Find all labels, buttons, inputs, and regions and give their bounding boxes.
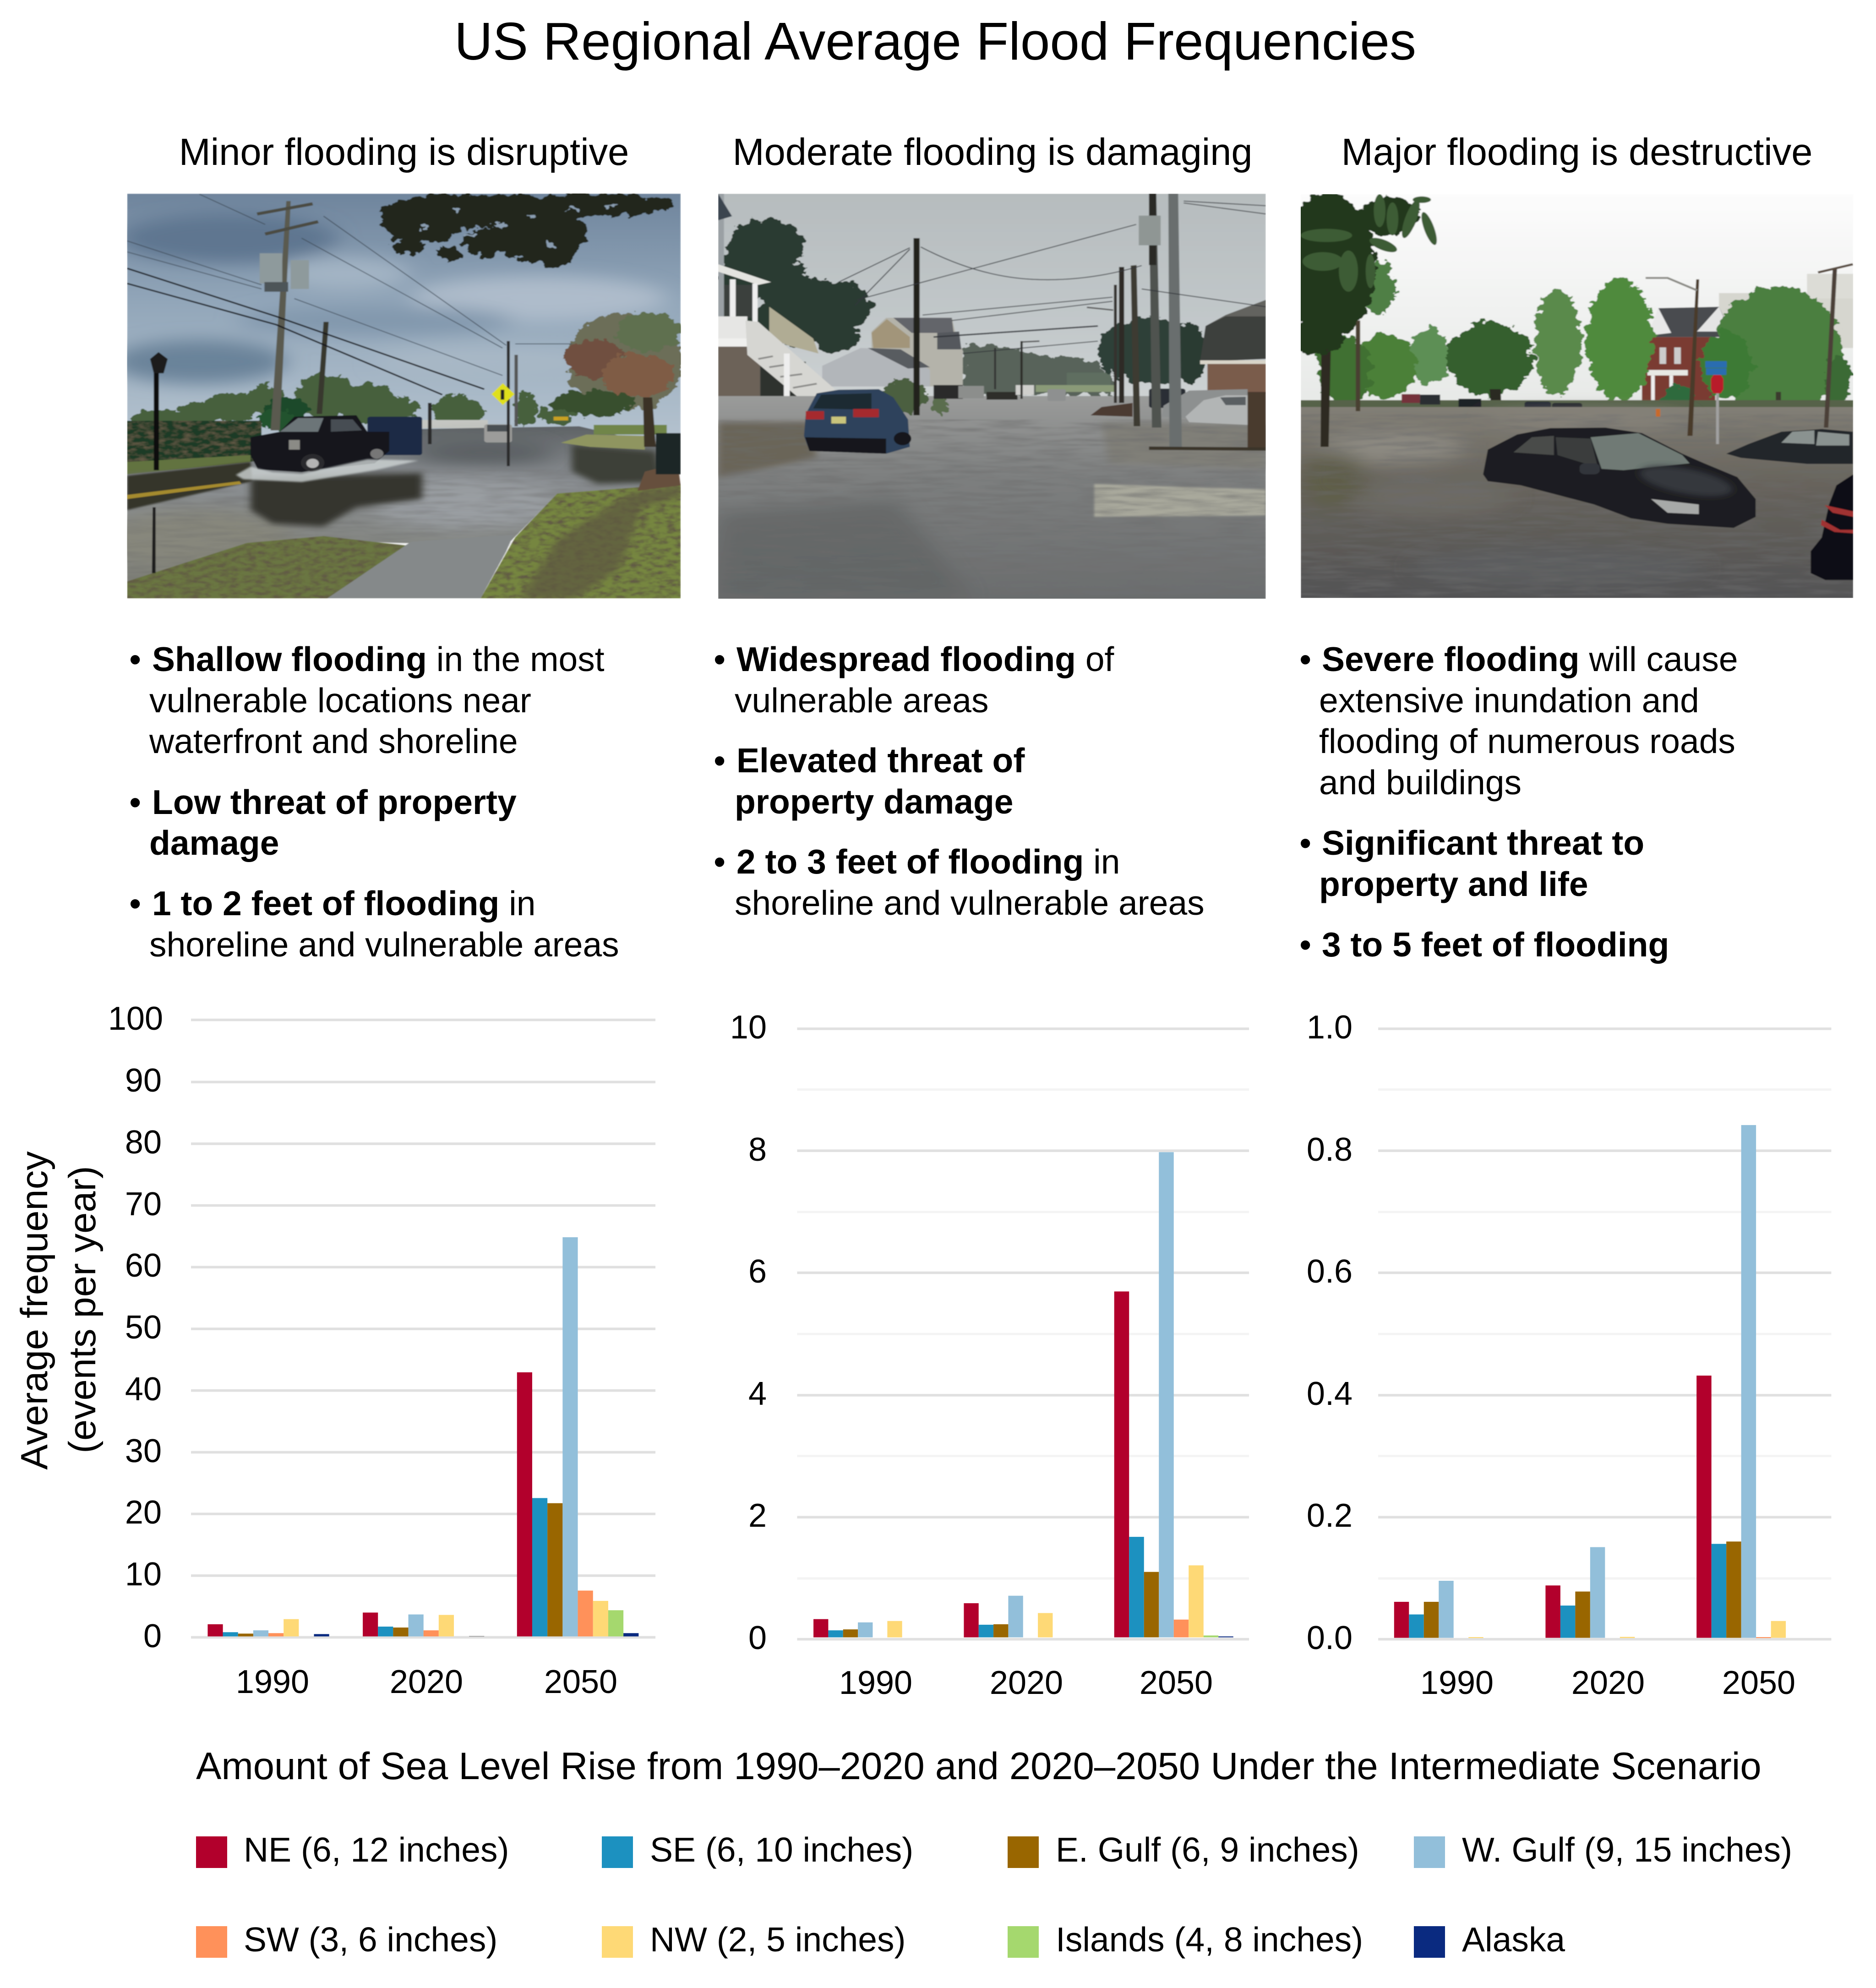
x-axis labels: 2050	[1722, 1665, 1795, 1701]
right tree	[552, 312, 683, 447]
text block: minor flooding bullets: vulnerable locations near	[149, 681, 531, 720]
bars 2050	[1114, 1152, 1233, 1637]
y-axis tick labels: 80	[125, 1124, 162, 1161]
y-axis tick labels: 0	[748, 1620, 767, 1656]
text block: minor flooding bullets: damage	[149, 824, 279, 862]
text block: minor flooding bullets: waterfront and shoreline	[149, 722, 518, 760]
y-axis tick labels: 30	[125, 1433, 162, 1469]
x-axis labels: 2050	[544, 1664, 617, 1700]
text block: moderate flooding bullets	[714, 640, 1205, 922]
x-axis labels: 2020	[1571, 1665, 1645, 1701]
y-axis tick labels: 1.0	[1307, 1009, 1352, 1046]
y-axis tick labels: 4	[748, 1376, 767, 1412]
brick house	[1642, 307, 1734, 403]
houses	[822, 318, 1116, 392]
bars 2020	[363, 1612, 484, 1637]
bars 2050	[517, 1237, 638, 1636]
poles and signs	[1320, 264, 1853, 447]
bars 2020	[1545, 1547, 1635, 1638]
heading: major flooding: Major flooding is destructive	[1342, 131, 1812, 173]
legend item: Alaska	[1414, 1920, 1565, 1959]
x-axis labels: 1990	[839, 1665, 912, 1701]
y-axis tick labels: 2	[748, 1497, 767, 1534]
y-axis tick labels: 10	[730, 1009, 767, 1046]
bushes and background vehicles	[882, 380, 1133, 417]
y-axis tick labels: 60	[125, 1247, 162, 1284]
x-axis labels: 2050	[1140, 1665, 1213, 1701]
y-axis tick labels	[1307, 1009, 1352, 1656]
main car	[1483, 428, 1756, 528]
bars 1990	[1394, 1581, 1483, 1638]
text block: moderate flooding bullets: •	[714, 640, 725, 678]
y-axis tick labels: 0	[143, 1618, 162, 1655]
text block: moderate flooding bullets: shoreline and vulnerable areas	[735, 884, 1205, 922]
y-axis tick labels: 0.0	[1307, 1620, 1352, 1656]
text block: major flooding bullets: extensive inundation and	[1319, 681, 1699, 720]
y-axis tick labels: 40	[125, 1371, 162, 1408]
flood water	[718, 396, 1266, 599]
text block: major flooding bullets: •	[1299, 640, 1311, 678]
y-axis tick labels: 100	[108, 1000, 163, 1037]
text block: major flooding bullets: Significant threat to	[1322, 824, 1644, 862]
chart: minor flooding frequencies	[108, 1000, 655, 1700]
overhanging magnolia	[1281, 193, 1440, 355]
text block: minor flooding bullets: •	[129, 640, 141, 678]
left elevated house and stairs	[718, 194, 835, 420]
y-axis tick labels: 6	[748, 1253, 767, 1290]
legend item: E. Gulf: E. Gulf (6, 9 inches)	[1056, 1830, 1359, 1869]
bars 1990	[813, 1619, 902, 1637]
parked cars on right	[1149, 388, 1266, 448]
chart: moderate flooding frequencies	[730, 1009, 1249, 1701]
text block: minor flooding bullets: •	[129, 884, 141, 923]
y-axis tick labels: 70	[125, 1186, 162, 1223]
text block: major flooding bullets: 3 to 5 feet of flooding	[1322, 925, 1669, 964]
legend item: SW: SW (3, 6 inches)	[244, 1920, 497, 1959]
title: US Regional Average Flood Frequencies	[454, 11, 1416, 71]
flood water	[1301, 407, 1853, 599]
y-axis title: (events per year)	[61, 1166, 104, 1453]
text block: moderate flooding bullets: •	[714, 842, 725, 881]
y-axis tick labels	[108, 1000, 163, 1655]
legend item: SE: SE (6, 10 inches)	[650, 1830, 913, 1869]
bars 2050	[1696, 1125, 1786, 1638]
text block: minor flooding bullets: Shallow flooding in the most	[152, 640, 605, 678]
text block: moderate flooding bullets: Elevated threat of	[736, 741, 1025, 780]
street trees	[1317, 262, 1851, 415]
SUV	[804, 389, 911, 454]
text block: major flooding bullets: •	[1299, 824, 1311, 862]
y-axis tick labels: 0.8	[1307, 1131, 1352, 1168]
legend item: NW: NW (2, 5 inches)	[650, 1920, 905, 1959]
y-axis tick labels	[730, 1009, 767, 1656]
text block: moderate flooding bullets: •	[714, 741, 725, 780]
x-axis labels	[236, 1664, 617, 1700]
utility poles, wires, lamp and sign	[127, 194, 572, 573]
text block: minor flooding bullets: •	[129, 783, 141, 821]
poles and transformer	[839, 194, 1266, 449]
x-axis labels: 2020	[990, 1665, 1063, 1701]
legend item: NE: NE (6, 12 inches)	[244, 1830, 509, 1869]
legend	[196, 1830, 1792, 1959]
photo: minor flooding, truck on a shallow flooded road	[104, 194, 683, 598]
photo: moderate flooding, street with SUV and utility poles	[718, 194, 1266, 599]
y-axis tick labels: 0.6	[1307, 1253, 1352, 1290]
y-axis tick labels: 0.4	[1307, 1376, 1352, 1412]
text block: major flooding bullets: Severe flooding will cause	[1322, 640, 1738, 678]
text block: minor flooding bullets	[129, 640, 619, 964]
bars 1990	[207, 1619, 329, 1636]
bars 2020	[964, 1596, 1053, 1637]
heading: minor flooding: Minor flooding is disruptive	[179, 131, 629, 173]
y-axis title: Average frequency	[13, 1151, 55, 1470]
bottom right car	[1811, 474, 1853, 580]
text block: moderate flooding bullets: vulnerable areas	[735, 681, 989, 720]
y-axis tick labels: 90	[125, 1062, 162, 1099]
text block: moderate flooding bullets: 2 to 3 feet of flooding in	[736, 842, 1120, 881]
dark pine trees	[720, 219, 872, 352]
y-axis title	[13, 1151, 104, 1470]
text block: moderate flooding bullets: Widespread flooding of	[736, 640, 1114, 678]
x-axis labels: 1990	[1420, 1665, 1494, 1701]
y-axis tick labels: 10	[125, 1556, 162, 1593]
chart: major flooding frequencies	[1307, 1009, 1831, 1701]
text block: major flooding bullets: and buildings	[1319, 763, 1522, 802]
x-axis title: Amount of Sea Level Rise from 1990–2020 and 2020–2050 Under the Intermediate Scenario	[196, 1745, 1761, 1787]
text block: minor flooding bullets: shoreline and vulnerable areas	[149, 925, 619, 964]
text block: minor flooding bullets: 1 to 2 feet of flooding in	[152, 884, 536, 923]
y-axis tick labels: 8	[748, 1131, 767, 1168]
photo: major flooding, submerged cars at an intersection	[1281, 193, 1853, 599]
text block: minor flooding bullets: Low threat of property	[152, 783, 517, 821]
heading: moderate flooding: Moderate flooding is damaging	[732, 131, 1253, 173]
x-axis labels	[1420, 1665, 1795, 1701]
x-axis labels	[839, 1665, 1213, 1701]
text block: major flooding bullets	[1299, 640, 1738, 964]
right car	[1726, 429, 1853, 464]
text block: moderate flooding bullets: property damage	[735, 782, 1013, 821]
background cars	[1402, 394, 1582, 413]
text block: major flooding bullets: •	[1299, 925, 1311, 964]
legend item: Alaska: Alaska	[1462, 1920, 1565, 1959]
y-axis tick labels: 20	[125, 1494, 162, 1531]
x-axis labels: 1990	[236, 1664, 309, 1700]
y-axis tick labels: 0.2	[1307, 1497, 1352, 1534]
legend item: Islands: Islands (4, 8 inches)	[1056, 1920, 1363, 1959]
legend item: W. Gulf: W. Gulf (9, 15 inches)	[1462, 1830, 1792, 1869]
x-axis labels: 2020	[390, 1664, 463, 1700]
right house	[1200, 300, 1266, 394]
y-axis tick labels: 50	[125, 1309, 162, 1346]
overhanging tree	[380, 194, 676, 267]
text block: major flooding bullets: property and life	[1319, 865, 1588, 903]
truck with trailer	[251, 415, 422, 472]
text block: major flooding bullets: flooding of numerous roads	[1319, 722, 1735, 760]
